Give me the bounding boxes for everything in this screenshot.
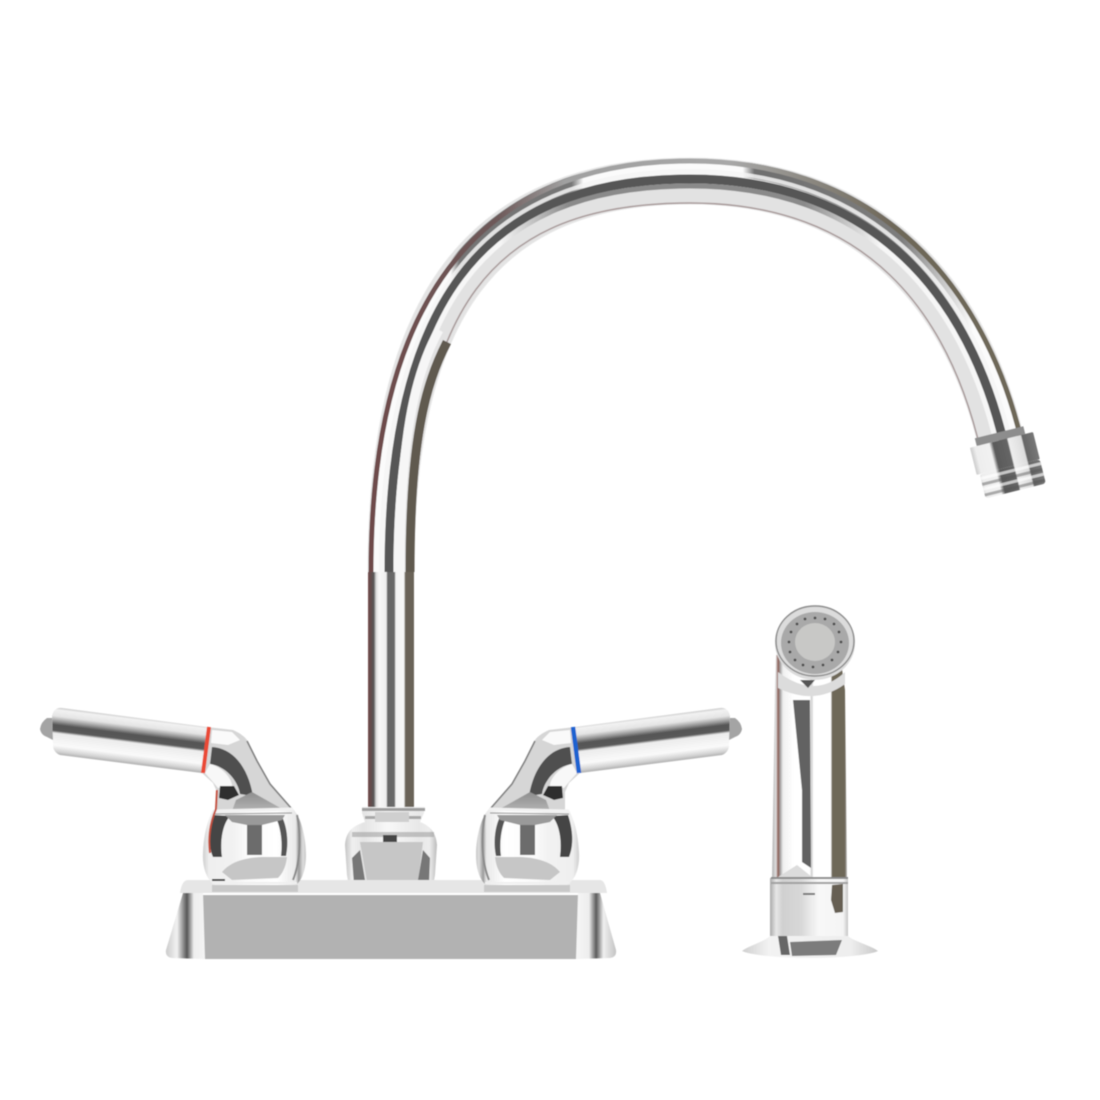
deck plate [166, 880, 616, 959]
inner edge [413, 203, 981, 572]
side sprayer body [772, 655, 847, 878]
curved gooseneck spout [371, 161, 1021, 572]
sprayer foot [742, 936, 878, 958]
spout riser tube [368, 570, 414, 815]
handle end cap [40, 718, 53, 740]
inner pale band [406, 196, 988, 572]
sprayer head [775, 606, 855, 680]
right cold handle [476, 708, 742, 892]
red hot indicator ring [203, 727, 209, 773]
nozzle holes [788, 617, 842, 668]
mid reflection [396, 186, 997, 572]
main dark band [389, 179, 1004, 572]
inner dark lower band [410, 342, 447, 572]
spout threaded outlet [968, 424, 1046, 499]
blue cold indicator ring [573, 727, 579, 773]
red reflection on dome edge [209, 790, 217, 853]
white strip beside inner dark band [400, 330, 439, 572]
nozzle face [781, 612, 849, 674]
crown white highlight [376, 166, 1016, 572]
left hot handle [40, 708, 306, 892]
handle elbow [202, 727, 293, 812]
nozzle button [795, 623, 835, 661]
thin highlight beside main dark band on right [381, 171, 1011, 572]
handle dome [203, 808, 306, 885]
white reflection band [381, 171, 1011, 572]
outer dark edge [371, 161, 1021, 572]
outer grey band [376, 166, 1016, 572]
central spout base [345, 807, 437, 892]
handle grip [52, 708, 207, 773]
sprayer lower sleeve [770, 877, 848, 938]
